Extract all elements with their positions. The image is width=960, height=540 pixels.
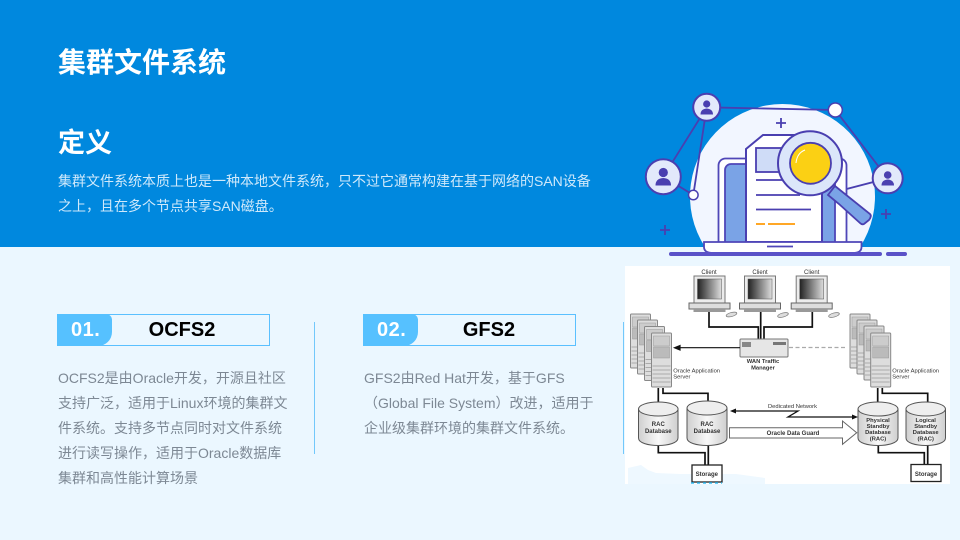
database: physical standby: Physical <box>866 418 890 424</box>
left application servers: Server <box>673 374 690 380</box>
storage: left: Storage <box>696 472 719 478</box>
header band <box>0 0 960 247</box>
laptop screen <box>718 158 846 248</box>
illustration: document search network <box>644 92 907 256</box>
cables <box>658 312 928 465</box>
badge: GFS2 <box>363 314 576 346</box>
database: logical standby: Logical <box>916 418 936 424</box>
database: RAC 1 <box>638 402 678 446</box>
diagram background <box>625 266 950 484</box>
text: OCFS2 description: 支持广泛，适用于Linux环境的集群文 <box>58 395 287 411</box>
title: 集群文件系统 <box>58 47 226 78</box>
text: GFS2 description: GFS2由Red Hat开发，基于GFS <box>364 370 565 386</box>
left application servers: Oracle Application <box>673 368 720 374</box>
network links <box>663 107 888 195</box>
right application servers: Server <box>892 374 909 380</box>
user node <box>646 159 681 194</box>
badge: GFS2: GFS2 <box>463 319 515 341</box>
plus signs <box>660 118 891 235</box>
WAN traffic manager <box>740 339 788 372</box>
database: RAC 1: Database <box>645 429 672 435</box>
badge: OCFS2 <box>57 314 270 346</box>
definition text: 集群文件系统本质上也是一种本地文件系统，只不过它通常构建在基于网络的SAN设备 <box>58 173 591 189</box>
badge: OCFS2: 01. <box>71 319 100 341</box>
heading: definition: 定义 <box>58 128 112 158</box>
client computers: Client <box>701 270 717 276</box>
user node <box>693 94 720 121</box>
laptop base <box>704 242 862 253</box>
database: physical standby: Standby <box>867 424 890 430</box>
text: GFS2 description: 企业级集群环境的集群文件系统。 <box>364 420 574 436</box>
client computers <box>689 270 840 318</box>
database: logical standby <box>906 402 946 446</box>
badge: GFS2: 02. <box>377 319 406 341</box>
dedicated network link: Dedicated Network <box>768 404 817 410</box>
text: OCFS2 description: OCFS2是由Oracle开发，开源且社区 <box>58 370 286 386</box>
database: physical standby: (RAC) <box>870 436 886 442</box>
link nodes <box>688 190 698 200</box>
text: GFS2 description: （Global File System）改进，适用于 <box>364 395 593 411</box>
text: OCFS2 description: 进行读写操作，适用于Oracle数据库 <box>58 445 281 461</box>
backdrop circle <box>690 104 875 247</box>
Oracle Data Guard arrow <box>730 421 857 444</box>
document <box>746 135 822 242</box>
right application servers <box>850 314 939 387</box>
definition text: 之上，且在多个节点共享SAN磁盘。 <box>58 198 283 214</box>
database: logical standby: Standby <box>914 424 938 430</box>
WAN traffic manager: Manager <box>751 366 776 372</box>
definition text <box>58 173 591 214</box>
database: RAC 1: RAC <box>652 422 665 428</box>
storage: right <box>911 464 941 482</box>
right application servers: Oracle Application <box>892 368 939 374</box>
database: physical standby: Database <box>865 430 892 436</box>
storage: right: Storage <box>915 472 938 478</box>
magnifier <box>828 186 871 224</box>
database: RAC 2: Database <box>694 429 721 435</box>
WAN traffic manager: WAN Traffic <box>747 359 780 365</box>
text: OCFS2 description: 件系统。支持多节点同时对文件系统 <box>58 420 282 436</box>
arrow: manager to left servers <box>674 346 740 350</box>
client computers: Client <box>752 270 768 276</box>
badge: OCFS2: OCFS2 <box>149 319 215 341</box>
database: RAC 2 <box>687 401 727 446</box>
dedicated network link <box>730 404 858 420</box>
text: OCFS2 description <box>58 370 287 486</box>
database: logical standby: Database <box>913 430 939 436</box>
dashed link: manager to right servers <box>789 346 847 348</box>
left application servers <box>630 314 720 387</box>
text: GFS2 description <box>364 370 593 436</box>
text: OCFS2 description: 集群和高性能计算场景 <box>58 470 198 486</box>
database: RAC 2: RAC <box>700 422 714 428</box>
architecture diagram <box>625 266 950 484</box>
database: logical standby: (RAC) <box>917 436 934 442</box>
ground line <box>671 252 905 256</box>
storage: left <box>691 465 722 483</box>
database: physical standby <box>858 402 898 446</box>
Oracle Data Guard arrow: Oracle Data Guard <box>767 431 820 437</box>
user node <box>873 163 903 193</box>
client computers: Client <box>804 270 820 276</box>
